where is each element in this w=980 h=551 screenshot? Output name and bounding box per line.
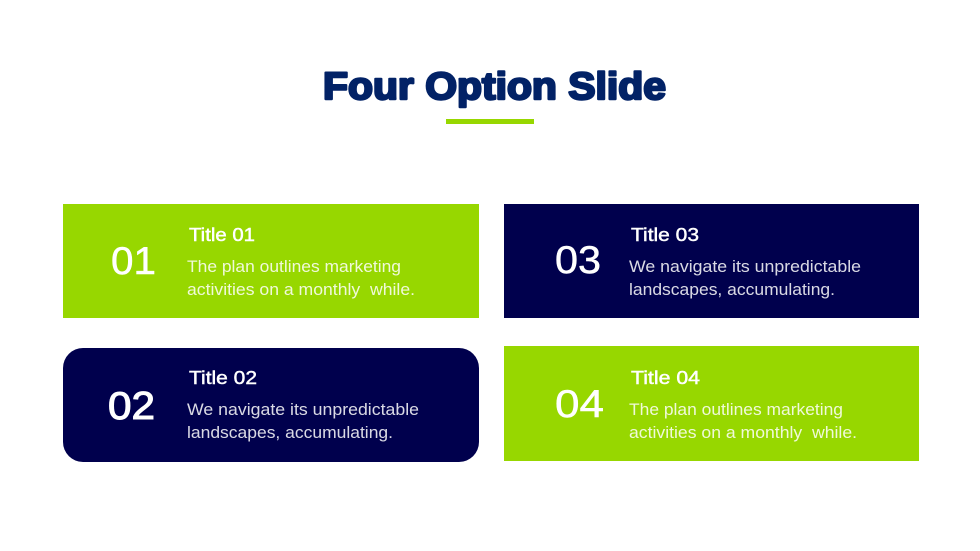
title underline: [446, 119, 534, 124]
number 03: 03: [555, 239, 601, 282]
heading: Title 02: Title 02: [189, 367, 257, 388]
description 03: We navigate its unpredictable: [629, 257, 861, 276]
description 02: landscapes, accumulating.: [187, 423, 393, 442]
description 03: landscapes, accumulating.: [629, 280, 835, 299]
title: Four Option Slide: [323, 66, 666, 108]
description 02: [187, 400, 419, 442]
description 01: The plan outlines marketing: [187, 257, 401, 276]
description 04: The plan outlines marketing: [629, 400, 843, 419]
description 04: [629, 400, 857, 442]
panel: option 02: [63, 348, 479, 462]
panel: option 04: [504, 346, 919, 461]
description 03: [629, 257, 861, 299]
heading: Title 03: Title 03: [631, 224, 699, 245]
description 01: activities on a monthly while.: [187, 280, 415, 299]
number 04: 04: [555, 383, 604, 426]
description 04: activities on a monthly while.: [629, 423, 857, 442]
number 02: 02: [108, 385, 155, 428]
number 01: 01: [111, 240, 156, 283]
heading: Title 04: Title 04: [631, 367, 700, 388]
panel: option 01: [63, 204, 479, 318]
description 01: [187, 257, 415, 299]
panel: option 03: [504, 204, 919, 318]
description 02: We navigate its unpredictable: [187, 400, 419, 419]
heading: Title 01: Title 01: [189, 224, 255, 245]
